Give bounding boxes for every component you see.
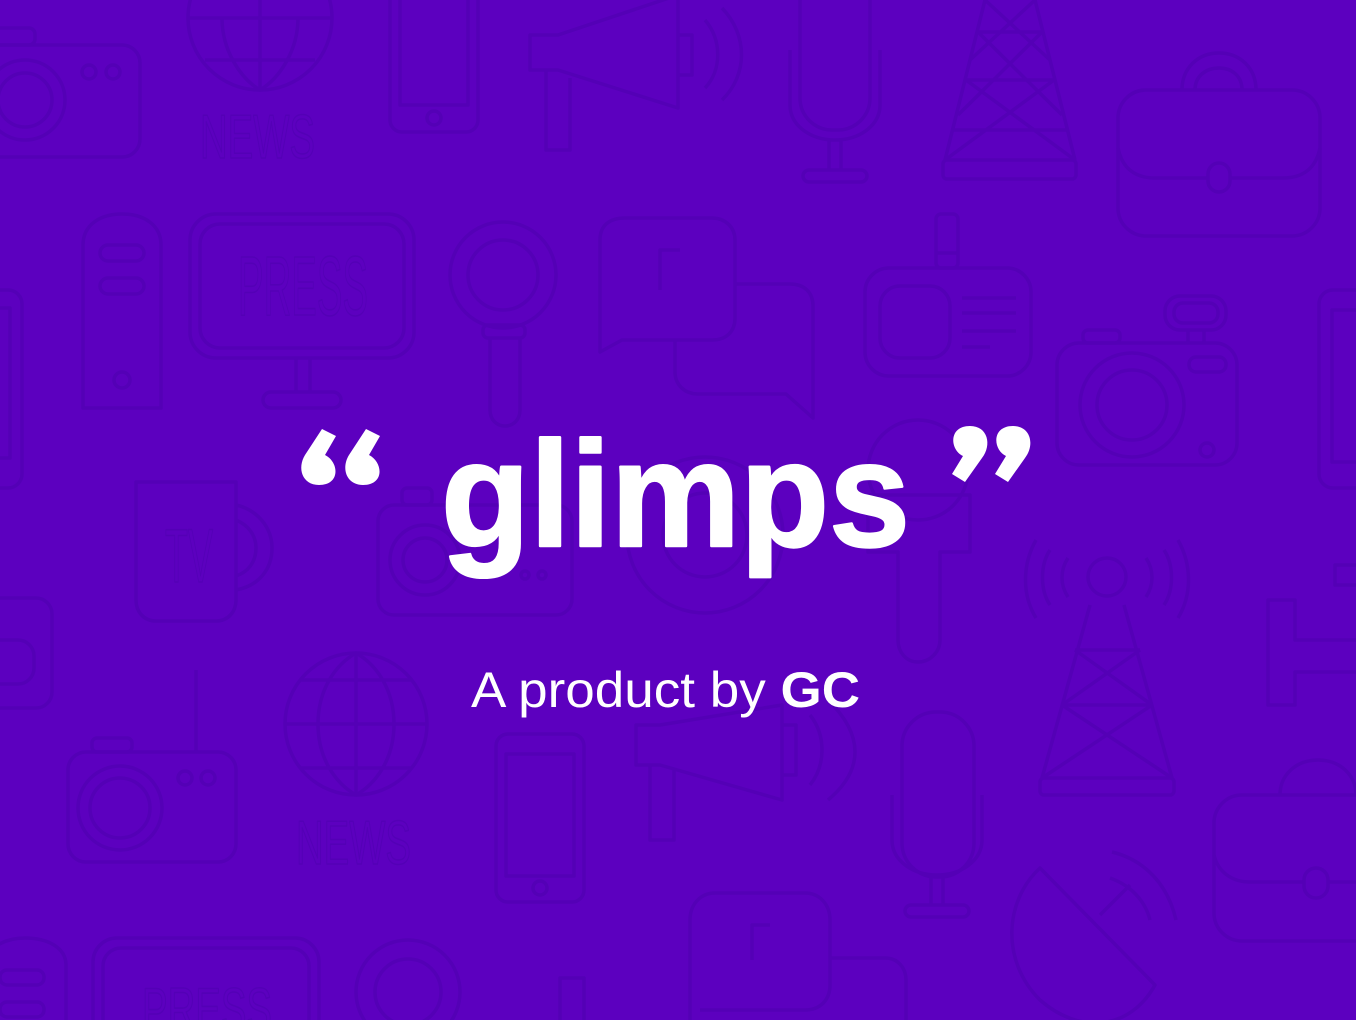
icon: left edge phone <box>0 290 22 488</box>
icon: press monitor bottom <box>93 938 319 1020</box>
icon: magnifier <box>450 222 556 426</box>
icon: phone top <box>390 0 478 132</box>
icon: speech bubbles <box>600 218 813 418</box>
icon: megaphone top <box>530 0 742 150</box>
icon: briefcase lower right <box>1214 760 1356 941</box>
icon: press monitor <box>190 214 414 408</box>
icon: phone lower <box>496 734 584 902</box>
icon: microphone lower <box>892 712 982 917</box>
icon: camera behind title <box>378 488 572 615</box>
icon: radio tower top <box>943 0 1076 179</box>
icon: briefcase top right <box>1118 53 1320 236</box>
icon: satellite dish <box>1012 852 1176 1020</box>
icon: news globe top <box>188 0 332 172</box>
icon: magnifier bottom <box>356 940 460 1020</box>
icon: broadcast tower <box>1026 540 1188 795</box>
title: glimps wordmark <box>301 410 1030 578</box>
icon: TV mug: TV <box>165 514 213 599</box>
icon: right edge H shape <box>1268 565 1356 705</box>
icon: id badge <box>865 214 1031 376</box>
icon: handheld microphone behind title <box>868 420 970 662</box>
icon: TV mug <box>136 482 272 621</box>
icon: remote control <box>83 214 161 408</box>
icon: news globe top: NEWS <box>200 103 315 172</box>
tagline: A product by GC: A product by GC <box>471 662 860 718</box>
icon: opening quotation mark <box>301 429 380 485</box>
icon: right edge phone <box>1319 290 1356 488</box>
icon: microphone top <box>790 0 880 182</box>
icon: megaphone lower <box>636 700 855 840</box>
icon: closing quotation mark <box>952 426 1030 482</box>
icon: camera lower left <box>68 670 236 862</box>
icon: news globe lower <box>285 653 427 878</box>
icon: radar behind title <box>627 457 783 613</box>
icon: camera top left <box>0 28 140 157</box>
icon: camera right <box>1057 296 1237 465</box>
icon: badge clip bottom <box>560 978 584 1020</box>
icon: speech bubbles lower <box>690 893 906 1020</box>
icon: left edge camera <box>0 598 52 708</box>
heading: glimps: glimps <box>441 410 910 578</box>
icon: remote bottom left <box>0 938 66 1020</box>
icon: news globe lower: NEWS <box>296 809 411 878</box>
icon: press monitor: PRESS <box>238 239 368 333</box>
